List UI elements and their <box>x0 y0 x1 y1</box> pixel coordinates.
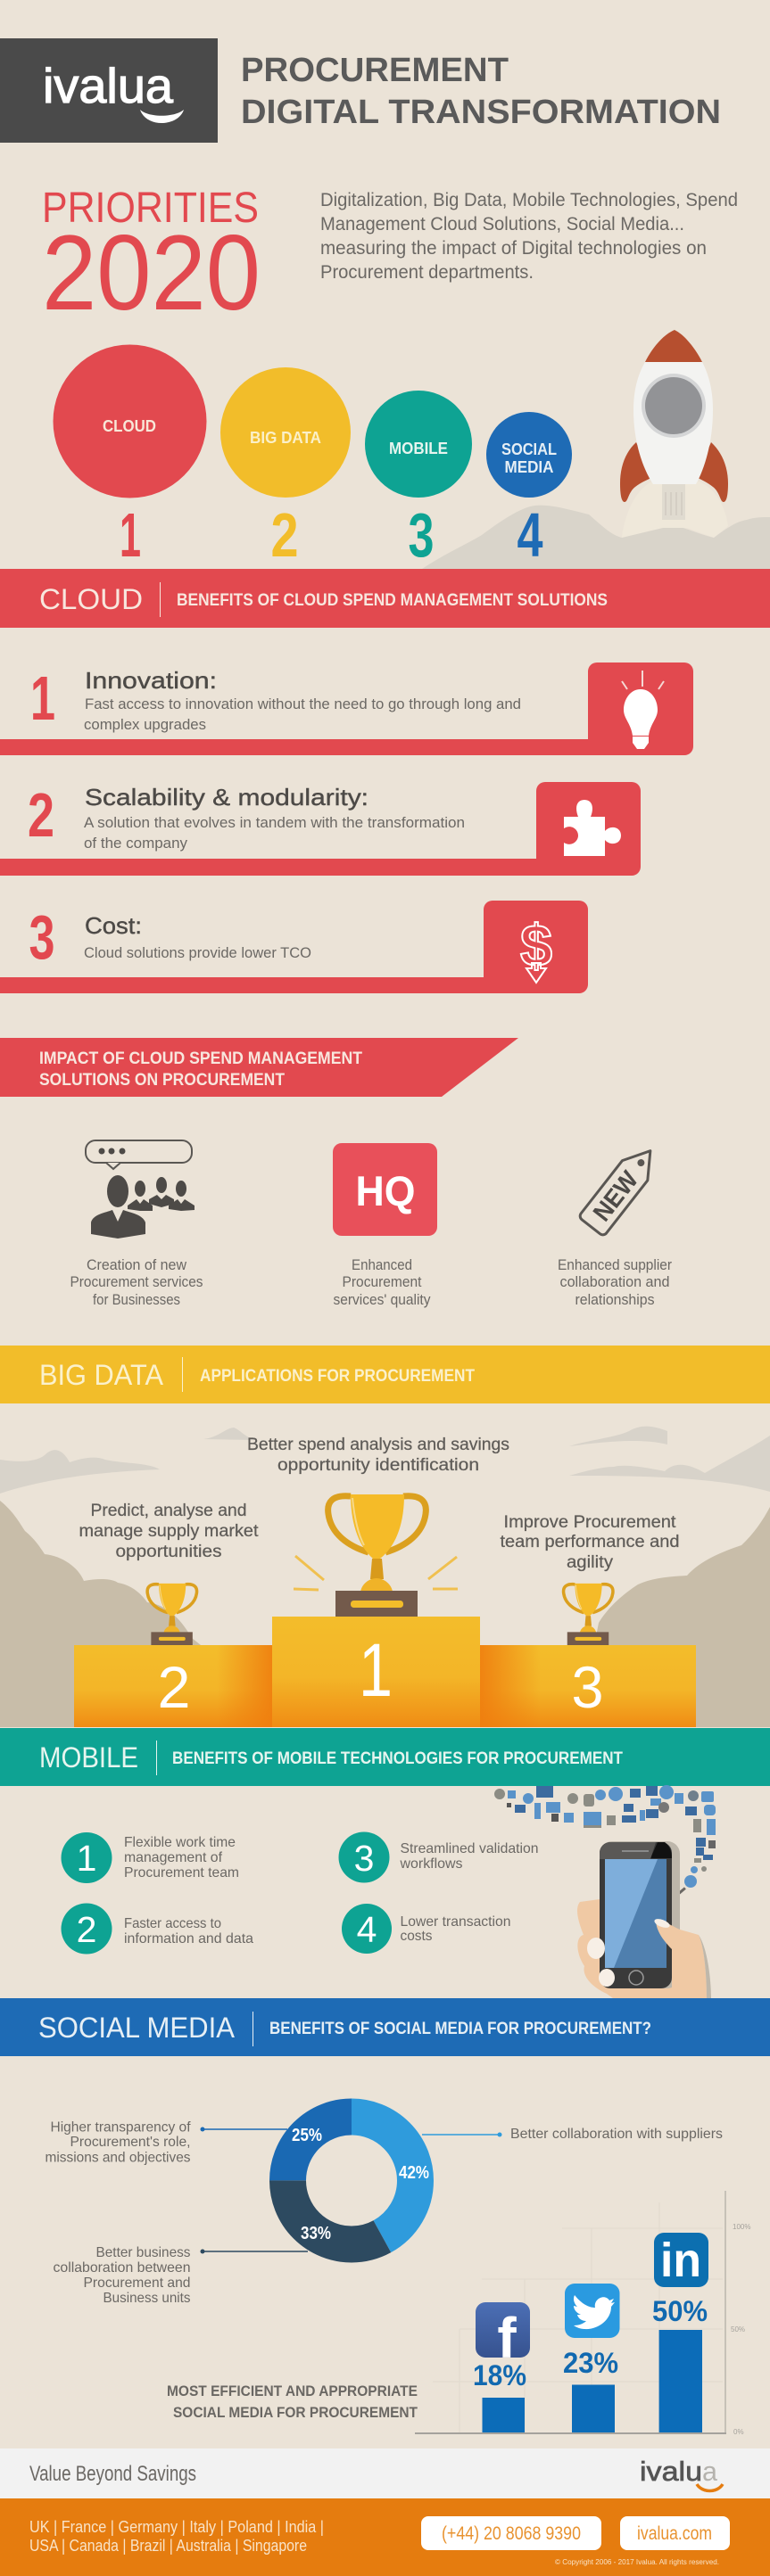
chart title: SOCIAL MEDIA FOR PROCUREMENT <box>173 2404 418 2421</box>
podium text: second <box>79 1502 259 1561</box>
benefit 3: cost: Cost: <box>85 912 142 939</box>
benefit 1: innovation: Innovation: <box>85 667 217 694</box>
donut label: transparency: Higher transparency of <box>50 2120 191 2135</box>
donut chart <box>287 2117 429 2244</box>
podium text: second: Predict, analyse and <box>91 1502 246 1520</box>
phone button: (+44) 20 8068 9390 <box>442 2523 581 2544</box>
donut label: transparency: missions and objectives <box>45 2151 191 2165</box>
mobile benefit 4: Lower transaction <box>400 1914 510 1930</box>
linkedin bar <box>652 2233 708 2432</box>
caption: Creation of new <box>87 1256 187 1273</box>
icon: HQ: HQ <box>355 1167 416 1214</box>
icon: new tag <box>578 1141 663 1237</box>
circle: cloud: 1 <box>120 500 141 570</box>
podium text: second: manage supply market <box>79 1522 259 1541</box>
phone <box>600 1841 680 1988</box>
donut chart: 42% <box>399 2163 429 2183</box>
circle: cloud <box>54 344 207 570</box>
benefit 1: innovation: Fast access to innovation without the need to go through long and <box>85 695 521 712</box>
benefit 2: scalability: A solution that evolves in tandem with the transformation <box>84 814 465 831</box>
donut label: business collaboration: Business units <box>103 2291 191 2306</box>
mobile benefit 4 <box>342 1904 510 1954</box>
mobile benefit 1 <box>61 1832 239 1883</box>
benefit 2: scalability: Scalability & modularity: <box>85 784 368 811</box>
chart scale: 100% <box>733 2223 750 2231</box>
finger nails <box>587 1917 671 1987</box>
benefit 2: scalability <box>0 780 641 876</box>
donut label: business collaboration: collaboration between <box>54 2260 191 2276</box>
section band: mobile: BENEFITS OF MOBILE TECHNOLOGIES FOR PROCUREMENT <box>172 1749 623 1768</box>
section band: mobile: MOBILE <box>39 1741 138 1774</box>
office locations: USA | Canada | Brazil | Australia | Singapore <box>29 2537 307 2555</box>
thumb and palm <box>656 1920 707 1998</box>
section band: social media: SOCIAL MEDIA <box>38 2012 236 2044</box>
benefit 3: cost: 3 <box>29 902 55 972</box>
circle: mobile: 3 <box>409 500 434 570</box>
section band: cloud: BENEFITS OF CLOUD SPEND MANAGEMENT SOLUTIONS <box>177 591 608 610</box>
caption: Procurement <box>343 1273 422 1290</box>
office locations <box>29 2518 324 2555</box>
podium text: first <box>247 1436 509 1475</box>
donut label: business collaboration: Procurement and <box>84 2276 191 2291</box>
priorities heading: PRIORITIES <box>42 185 259 232</box>
trophy: first place <box>294 1494 458 1617</box>
donut label: business collaboration: Better business <box>96 2245 191 2260</box>
mobile benefit 4: costs <box>400 1929 432 1944</box>
icon: people with speech bubble <box>86 1140 195 1239</box>
donut label: suppliers: Better collaboration with suppliers <box>510 2127 723 2142</box>
mobile benefit 2: Faster access to <box>124 1916 221 1931</box>
intro paragraph: Management Cloud Solutions, Social Media... <box>320 214 684 235</box>
circle: social media: SOCIAL <box>501 440 557 458</box>
mobile benefit 1: Procurement team <box>124 1865 239 1881</box>
caption: Enhanced supplier <box>558 1256 672 1273</box>
phone button <box>421 2516 601 2550</box>
facebook bar <box>473 2302 530 2432</box>
benefit 3: cost: Cloud solutions provide lower TCO <box>84 944 311 961</box>
donut label: business collaboration <box>54 2245 308 2306</box>
mobile benefit 1: 1 <box>77 1838 96 1879</box>
footer logo: a <box>702 2456 718 2487</box>
podium: 1 <box>359 1628 393 1712</box>
caption: Enhanced <box>352 1256 412 1273</box>
section band: social media <box>0 1998 770 2056</box>
benefit 1: innovation: 1 <box>30 663 55 733</box>
logo box: ivalua <box>43 58 173 113</box>
icon: puzzle piece <box>564 800 621 856</box>
icon: HQ <box>333 1143 437 1236</box>
podium <box>74 1617 696 1727</box>
footer tagline band: Value Beyond Savings <box>29 2462 196 2486</box>
mobile benefit 4: 4 <box>357 1909 377 1950</box>
chart scale: 50% <box>731 2325 745 2333</box>
mobile benefit 3 <box>339 1831 539 1883</box>
caption <box>70 1256 203 1308</box>
circle: mobile: MOBILE <box>389 440 448 457</box>
website button: ivalua.com <box>637 2523 712 2544</box>
icon: light bulb <box>622 671 664 749</box>
donut chart: 33% <box>301 2224 331 2243</box>
facebook bar: 18% <box>473 2359 526 2391</box>
section band: cloud <box>0 569 770 628</box>
caption <box>558 1256 672 1308</box>
intro paragraph: measuring the impact of Digital technologies on <box>320 238 707 259</box>
circle: social media <box>486 412 572 570</box>
benefit 2: scalability: of the company <box>84 835 187 852</box>
benefit 2: scalability: 2 <box>28 780 54 850</box>
mobile benefit 1: management of <box>124 1850 223 1865</box>
podium text: first: opportunity identification <box>277 1456 479 1475</box>
footer logo: ivalu <box>640 2456 702 2487</box>
caption: collaboration and <box>560 1273 669 1290</box>
footer logo <box>640 2456 723 2491</box>
title: PROCUREMENT <box>241 52 509 89</box>
section band: social media: BENEFITS OF SOCIAL MEDIA FOR PROCUREMENT? <box>269 2020 651 2038</box>
smoke cloud <box>422 506 770 569</box>
mobile benefit 3: Streamlined validation <box>400 1841 539 1856</box>
hand back <box>577 1899 678 1998</box>
impact item: new services <box>70 1140 203 1308</box>
hand holding phone <box>577 1841 711 1998</box>
circle: mobile <box>365 391 472 570</box>
intro paragraph <box>320 190 738 283</box>
podium text: third <box>500 1513 680 1572</box>
donut label: transparency: Procurement's role, <box>70 2135 191 2150</box>
chart title: MOST EFFICIENT AND APPROPRIATE <box>167 2383 418 2399</box>
office locations: UK | France | Germany | Italy | Poland | India | <box>29 2518 324 2536</box>
caption: services' quality <box>334 1291 431 1308</box>
benefit 3: cost <box>0 901 588 993</box>
impact banner: SOLUTIONS ON PROCUREMENT <box>39 1071 285 1090</box>
intro paragraph: Procurement departments. <box>320 262 534 283</box>
linkedin bar: 50% <box>652 2295 708 2327</box>
website button <box>620 2516 730 2550</box>
bar chart <box>415 2191 750 2436</box>
podium: 3 <box>571 1654 603 1720</box>
benefit 1: innovation <box>0 663 693 755</box>
title: DIGITAL TRANSFORMATION <box>241 94 721 131</box>
section band: big data: APPLICATIONS FOR PROCUREMENT <box>200 1367 475 1386</box>
twitter bar <box>563 2284 619 2432</box>
circle: big data: 2 <box>271 500 298 570</box>
section band: mobile <box>0 1728 770 1786</box>
donut label: transparency <box>45 2120 287 2165</box>
mobile benefit 2: 2 <box>77 1909 96 1950</box>
donut chart: 25% <box>292 2126 322 2145</box>
mobile benefit 2: information and data <box>124 1931 253 1946</box>
mobile benefit 3: workflows <box>400 1856 462 1872</box>
impact banner <box>0 1038 518 1097</box>
circle: social media: MEDIA <box>505 458 553 476</box>
footer contact band <box>0 2498 770 2576</box>
circle: social media: 4 <box>517 500 543 570</box>
priority circles <box>54 344 572 570</box>
mobile benefit 2 <box>61 1903 253 1955</box>
benefit 1: innovation: complex upgrades <box>84 716 206 733</box>
impact banner: IMPACT OF CLOUD SPEND MANAGEMENT <box>39 1049 362 1068</box>
icon: rocket <box>620 330 728 538</box>
podium text: third: team performance and <box>500 1533 680 1551</box>
footer tagline band <box>0 2448 770 2498</box>
chart scale: 0% <box>733 2428 744 2436</box>
podium text: first: Better spend analysis and savings <box>247 1436 509 1454</box>
priorities heading: 2020 <box>42 213 261 333</box>
section band: big data <box>0 1346 770 1403</box>
icon: dollar arrow: $ <box>520 912 552 978</box>
podium scene background <box>0 1427 770 1727</box>
impact item: supplier collaboration <box>558 1141 672 1308</box>
podium: 2 <box>157 1654 191 1720</box>
trophy: second place <box>147 1584 197 1645</box>
caption: for Businesses <box>93 1291 180 1308</box>
impact item: quality <box>333 1143 437 1308</box>
facebook bar: f <box>497 2306 517 2370</box>
circle: big data <box>220 367 351 570</box>
caption: relationships <box>575 1291 655 1308</box>
twitter bar: 23% <box>563 2347 618 2379</box>
caption: Procurement services <box>70 1273 203 1290</box>
intro paragraph: Digitalization, Big Data, Mobile Technologies, Spend <box>320 190 738 210</box>
caption <box>334 1256 431 1308</box>
linkedin bar: in <box>660 2234 701 2287</box>
circle: big data: BIG DATA <box>250 429 321 447</box>
app icon cloud <box>494 1785 716 1903</box>
mobile benefit 1: Flexible work time <box>124 1835 236 1850</box>
title <box>241 52 721 131</box>
chart axes <box>724 2191 726 2433</box>
podium text: second: opportunities <box>116 1543 221 1561</box>
trophy: third place <box>564 1584 613 1645</box>
section band: cloud: CLOUD <box>39 583 143 615</box>
chart title <box>167 2383 418 2421</box>
logo box <box>0 38 218 143</box>
chart grid <box>433 2202 723 2433</box>
chart scale <box>731 2223 750 2436</box>
icon: new tag: NEW <box>588 1165 643 1226</box>
section band: big data: BIG DATA <box>39 1359 164 1391</box>
copyright: © Copyright 2006 - 2017 Ivalua. All rights reserved. <box>555 2558 719 2566</box>
mobile benefit 3: 3 <box>354 1838 374 1879</box>
circle: cloud: CLOUD <box>103 417 156 435</box>
header <box>0 38 721 143</box>
podium text: third: Improve Procurement <box>503 1513 676 1532</box>
podium text: third: agility <box>567 1553 614 1572</box>
